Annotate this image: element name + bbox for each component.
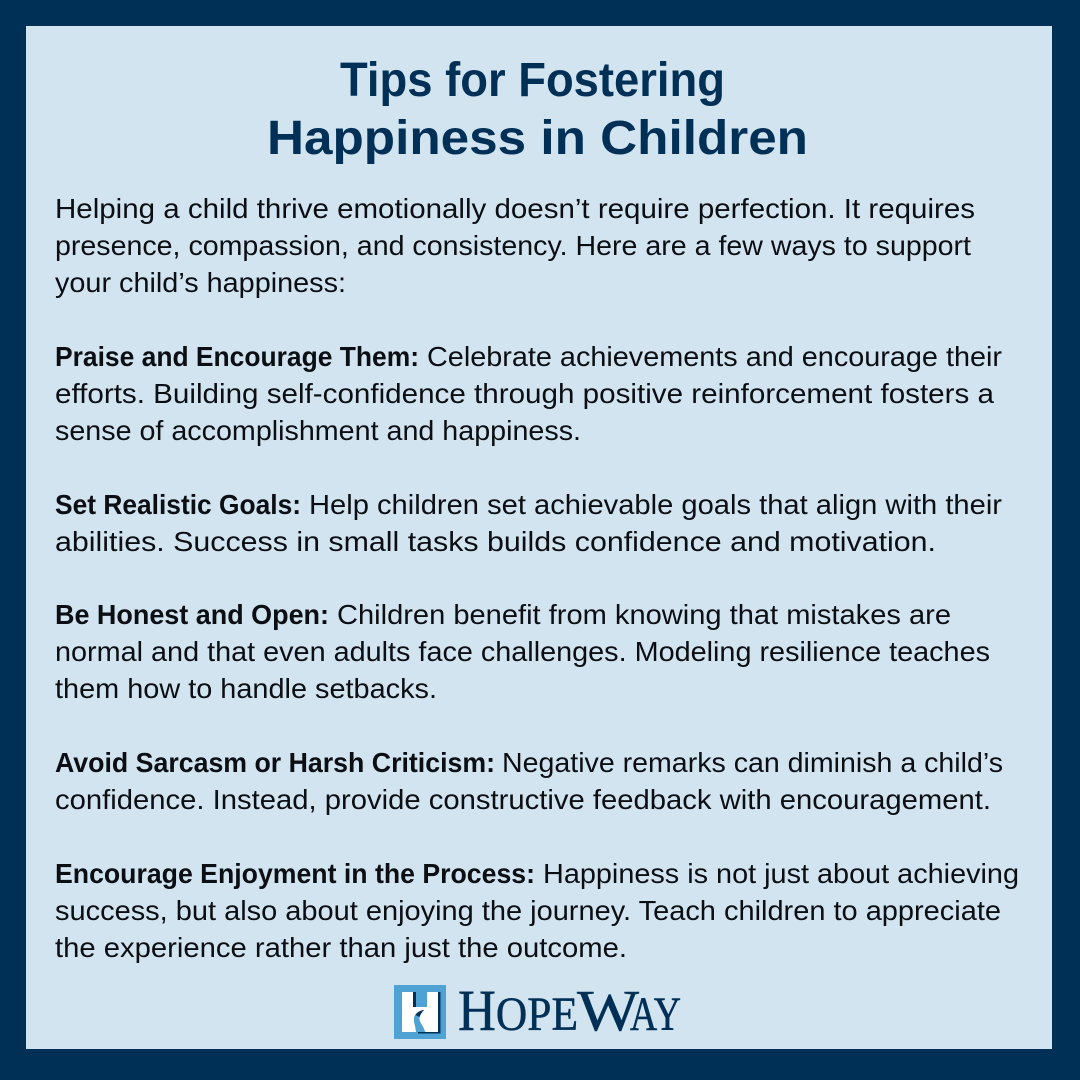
text block: be honest and open: Be Honest and Open:	[55, 599, 329, 630]
text block: avoid sarcasm or harsh criticism: Negative remarks can diminish a child’s	[502, 747, 1003, 778]
text block: praise and encourage them	[55, 341, 1002, 446]
text block: encourage enjoyment in the process	[55, 858, 1019, 963]
text block: be honest and open: them how to handle setbacks.	[55, 673, 437, 704]
wordmark: W	[577, 978, 639, 1043]
text block: encourage enjoyment in the process: Encourage Enjoyment in the Process:	[55, 858, 535, 889]
text block: praise and encourage them: Praise and Encourage Them:	[55, 341, 419, 372]
text block: praise and encourage them: efforts. Building self-confidence through positive reinforcement fosters a	[55, 378, 995, 409]
text block: encourage enjoyment in the process: success, but also about enjoying the journey. Teach children to appreciate	[55, 895, 1001, 926]
text block: encourage enjoyment in the process: the experience rather than just the outcome.	[55, 932, 627, 963]
text block: set realistic goals: Set Realistic Goals:	[55, 489, 301, 520]
text block: praise and encourage them: sense of accomplishment and happiness.	[55, 415, 581, 446]
text block: be honest and open: Children benefit from knowing that mistakes are	[337, 599, 951, 630]
text block: introduction: Helping a child thrive emotionally doesn’t require perfection. It requires	[55, 193, 975, 224]
text block: set realistic goals: abilities. Success in small tasks builds confidence and motivation.	[55, 526, 936, 557]
text block: praise and encourage them: Celebrate achievements and encourage their	[427, 341, 1002, 372]
text block: avoid sarcasm or harsh criticism: Avoid Sarcasm or Harsh Criticism:	[55, 747, 495, 778]
wordmark	[458, 978, 681, 1043]
title	[267, 53, 808, 165]
title: Happiness in Children	[267, 111, 808, 165]
text block: introduction: your child’s happiness:	[55, 267, 346, 298]
text block: be honest and open	[55, 599, 990, 704]
text block: introduction	[55, 193, 975, 298]
logo: HopeWay	[394, 978, 681, 1043]
text block: be honest and open: normal and that even adults face challenges. Modeling resilience teaches	[55, 636, 990, 667]
text block: introduction: presence, compassion, and consistency. Here are a few ways to support	[55, 230, 971, 261]
icon: HopeWay H mark	[394, 985, 446, 1039]
wordmark: HOPE	[458, 978, 578, 1043]
text block: encourage enjoyment in the process: Happiness is not just about achieving	[543, 858, 1019, 889]
text block: set realistic goals: Help children set achievable goals that align with their	[309, 489, 1002, 520]
title: Tips for Fostering	[340, 53, 725, 107]
text block: avoid sarcasm or harsh criticism: confidence. Instead, provide constructive feedback with encouragement.	[55, 784, 991, 815]
wordmark: AY	[630, 988, 681, 1041]
text block: set realistic goals	[55, 489, 1002, 557]
text block: avoid sarcasm or harsh criticism	[55, 747, 1003, 815]
